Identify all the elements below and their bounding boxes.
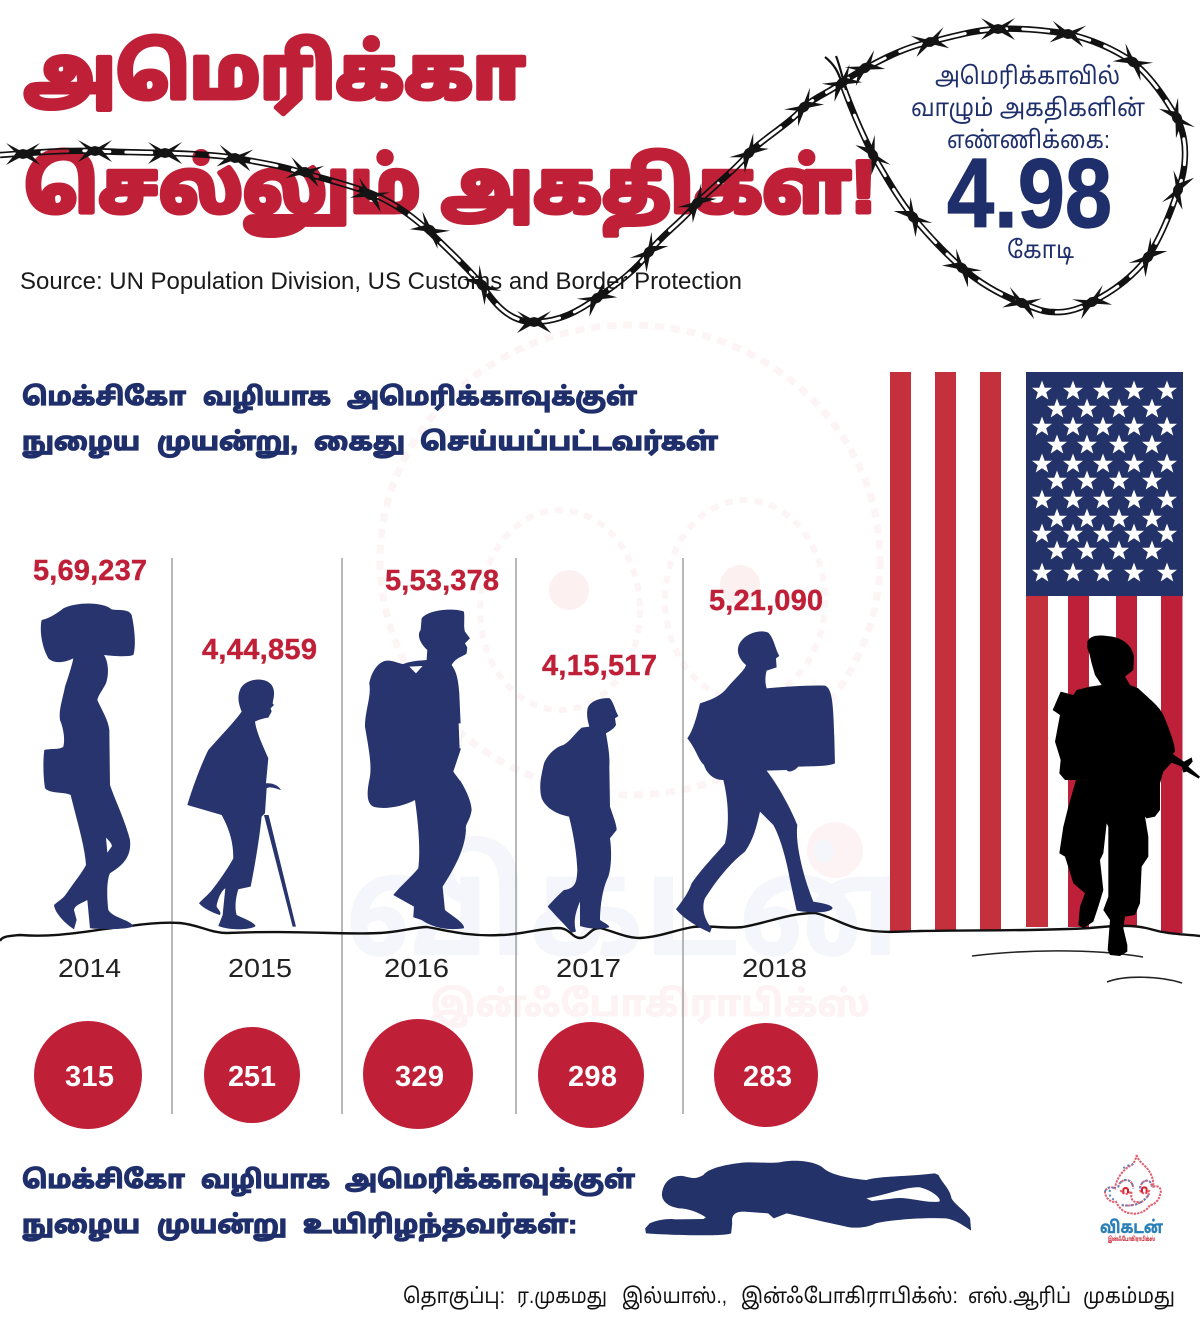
heading: arrested: நுழைய: [22, 428, 140, 458]
heading: deaths: நுழைய: [22, 1211, 140, 1241]
arrest counts: 4,44,859: [202, 634, 317, 666]
death count circles: 251: [228, 1061, 276, 1093]
title: [24, 33, 876, 235]
heading: arrested: முயன்று,: [157, 428, 298, 458]
callout: refugees living in America: அமெரிக்காவில்: [935, 63, 1120, 90]
lying figure silhouette: [645, 1161, 971, 1235]
credits: முகம்மது: [1083, 1285, 1175, 1310]
callout: refugees living in America: [911, 63, 1145, 265]
source line: Source: UN Population Division, US Customs and Border Protection: [20, 268, 742, 295]
credits: தொகுப்பு:: [403, 1285, 505, 1310]
arrest counts: 5,53,378: [385, 565, 499, 597]
arrest counts: 5,69,237: [33, 555, 147, 587]
callout: refugees living in America: 4.98: [947, 138, 1112, 248]
heading: arrested: செய்யப்பட்டவர்கள்: [420, 428, 718, 456]
year dividers: [172, 558, 683, 1114]
credits: எஸ்.ஆரிப்: [968, 1285, 1071, 1310]
arrest counts: [33, 555, 823, 682]
heading: arrested: மெக்சிகோ: [22, 383, 186, 411]
death count circles: [34, 1019, 818, 1129]
credits: இல்யாஸ்.,: [622, 1285, 727, 1310]
silhouette 2018: [676, 631, 835, 933]
soldier silhouette: [1053, 636, 1200, 956]
credits: இன்ஃபோகிராபிக்ஸ்:: [741, 1284, 958, 1310]
death count circles: 298: [568, 1061, 617, 1093]
arrest counts: 4,15,517: [542, 650, 657, 682]
heading: deaths: மெக்சிகோ: [22, 1166, 185, 1194]
barbed wire: [0, 18, 1195, 333]
logo: vikatan: [1100, 1155, 1163, 1243]
heading: deaths: முயன்று: [157, 1211, 287, 1241]
heading: arrested: [22, 383, 718, 458]
logo: vikatan: இன்ஃபோகிராபிக்ஸ்: [1108, 1235, 1155, 1243]
arrest counts: 5,21,090: [709, 585, 823, 617]
year labels: [58, 953, 807, 983]
heading: deaths: உயிரிழந்தவர்கள்:: [303, 1211, 577, 1241]
watermark: vikatan infographics: விகடன்: [345, 828, 910, 985]
watermark: vikatan infographics: [345, 325, 910, 1028]
silhouette 2015: [187, 680, 296, 929]
death count circles: 329: [395, 1061, 444, 1093]
callout: refugees living in America: எண்ணிக்கை:: [947, 127, 1110, 154]
silhouette 2017: [540, 698, 618, 933]
death count circles: 283: [743, 1061, 792, 1093]
year labels: 2014: [58, 953, 121, 983]
year labels: 2015: [228, 953, 292, 983]
callout: refugees living in America: வாழும் அகதிகளின்: [911, 95, 1145, 124]
heading: arrested: கைது: [314, 428, 405, 458]
title: அமெரிக்கா: [24, 33, 525, 114]
heading: deaths: வழியாக: [201, 1166, 330, 1196]
credits: ர.முகமது: [517, 1285, 607, 1310]
silhouette 2016: [365, 610, 472, 929]
logo: vikatan: விகடன்: [1100, 1218, 1163, 1237]
credits: [403, 1284, 1175, 1310]
year labels: 2018: [742, 953, 807, 983]
heading: arrested: அமெரிக்காவுக்குள்: [347, 383, 637, 413]
silhouette 2014: [41, 603, 135, 929]
callout: refugees living in America: கோடி: [1007, 237, 1074, 265]
watermark: vikatan infographics: இன்ஃபோகிராபிக்ஸ்: [430, 983, 870, 1028]
death count circles: 315: [65, 1061, 114, 1093]
title: செல்லும் அகதிகள்!: [24, 147, 876, 235]
heading: deaths: அமெரிக்காவுக்குள்: [345, 1166, 635, 1196]
ground marks near soldier: [972, 951, 1182, 983]
year labels: 2017: [556, 953, 621, 983]
ground line: [0, 913, 1200, 941]
flag: [890, 372, 1183, 933]
year labels: 2016: [384, 953, 449, 983]
heading: arrested: வழியாக: [203, 383, 331, 413]
heading: deaths: [22, 1166, 635, 1241]
